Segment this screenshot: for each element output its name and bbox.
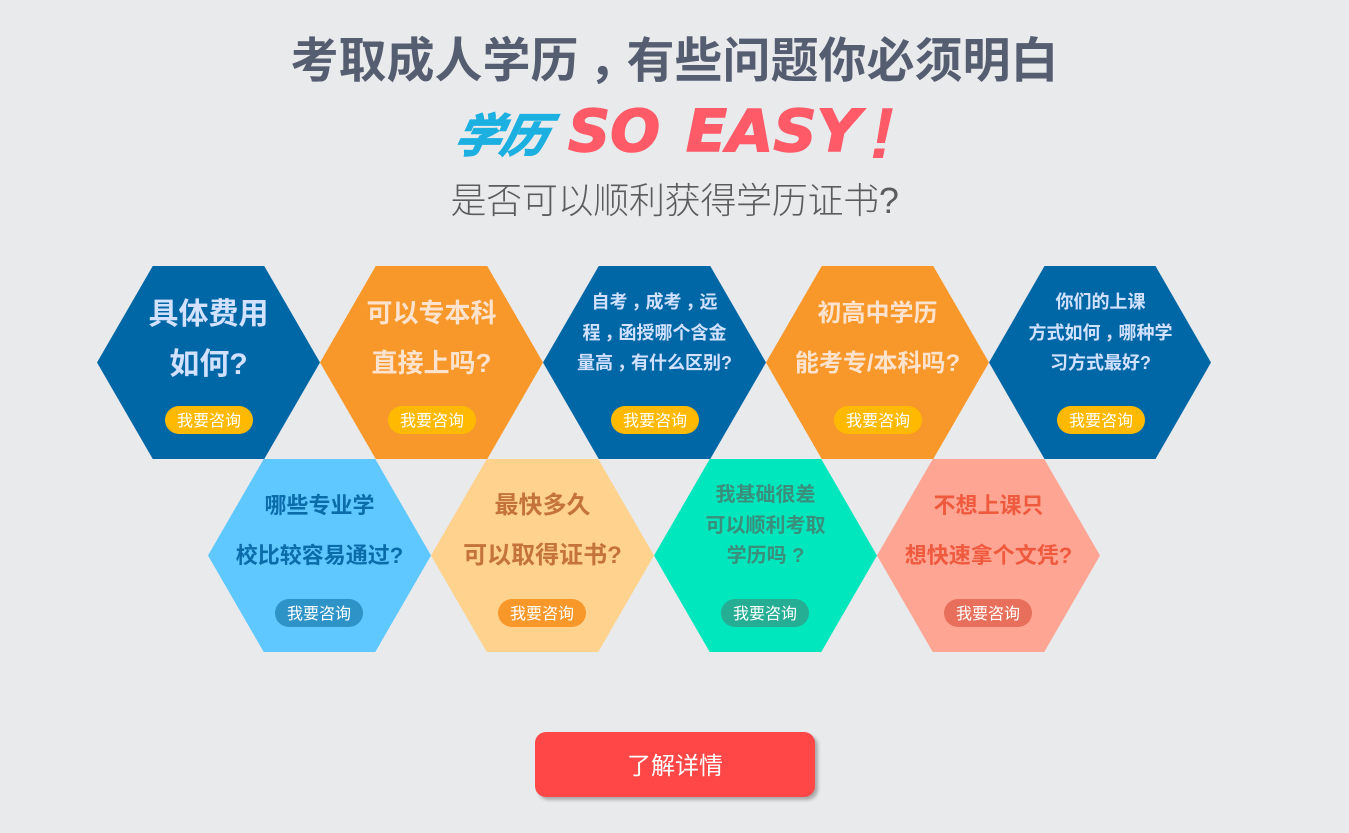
hexagon: 上课方式: 方式如何，哪种学 xyxy=(1028,322,1172,342)
hexagon: 基础很差 xyxy=(654,459,877,652)
slogan: 学历 SO EASY!: EASY xyxy=(686,98,865,165)
slogan: 学历 SO EASY! xyxy=(450,98,894,168)
title: 考取成人学历，有些问题你必须明白 xyxy=(290,35,1059,88)
hexagon: 不想上课 xyxy=(877,459,1100,652)
hexagon: 具体费用 xyxy=(97,266,320,459)
hexagon: 哪些专业学校: 校比较容易通过? xyxy=(236,543,403,568)
hexagon: 可以专本科: 我要咨询 xyxy=(400,413,464,430)
hexagon: 具体费用: 如何? xyxy=(169,348,248,381)
hexagon: 哪些专业学校: 我要咨询 xyxy=(287,606,351,623)
hexagon: 具体费用: 具体费用 xyxy=(148,298,268,331)
hexagon: 自考成考远程: 自考，成考，远 xyxy=(592,292,718,312)
hexagon: 初高中学历: 我要咨询 xyxy=(846,413,910,430)
hexagon: 自考成考远程: 量高，有什么区别? xyxy=(577,353,732,373)
button: 了解详情: 了解详情 xyxy=(627,753,723,780)
hexagon: 上课方式 xyxy=(989,266,1211,459)
button: 了解详情 xyxy=(535,732,815,797)
hexagon: 可以专本科 xyxy=(320,266,543,459)
hexagon: 初高中学历 xyxy=(766,266,989,459)
hexagon: 自考成考远程: 我要咨询 xyxy=(623,413,687,430)
hexagon: 不想上课: 我要咨询 xyxy=(956,606,1020,623)
hexagon: 不想上课: 不想上课只 xyxy=(933,493,1044,518)
hexagon: 上课方式: 你们的上课 xyxy=(1056,292,1146,312)
slogan: 学历 SO EASY!: SO xyxy=(568,98,660,165)
hexagon: 最快多久 xyxy=(431,459,654,652)
hexagon: 可以专本科: 直接上吗? xyxy=(372,348,491,378)
hexagon: 上课方式: 习方式最好? xyxy=(1050,353,1151,373)
hexagon: 基础很差: 学历吗 ? xyxy=(727,545,804,567)
hexagon: 具体费用: 我要咨询 xyxy=(177,413,241,430)
hexagon: 最快多久: 最快多久 xyxy=(494,492,590,519)
hexagon: 哪些专业学校: 哪些专业学 xyxy=(264,493,374,518)
subtitle: 是否可以顺利获得学历证书? xyxy=(450,180,899,221)
hexagon: 基础很差: 可以顺利考取 xyxy=(706,514,826,536)
hexagon: 上课方式: 我要咨询 xyxy=(1069,413,1133,430)
hexagon: 不想上课: 想快速拿个文凭? xyxy=(905,543,1072,568)
hexagon: 可以专本科: 可以专本科 xyxy=(366,298,496,328)
slogan: 学历 SO EASY!: 学历 xyxy=(450,110,561,162)
hexagon: 初高中学历: 初高中学历 xyxy=(818,300,938,327)
hexagon: 最快多久: 我要咨询 xyxy=(510,606,574,623)
hexagon: 自考成考远程 xyxy=(543,266,766,459)
hexagon: 基础很差: 我基础很差 xyxy=(716,484,816,506)
hexagon: 初高中学历: 能考专/本科吗? xyxy=(795,350,960,377)
hexagon: 自考成考远程: 程，函授哪个含金 xyxy=(582,322,726,342)
hexagon: 基础很差: 我要咨询 xyxy=(733,606,797,623)
hexagon: 最快多久: 可以取得证书? xyxy=(463,542,622,569)
hexagon: 哪些专业学校 xyxy=(208,459,431,652)
